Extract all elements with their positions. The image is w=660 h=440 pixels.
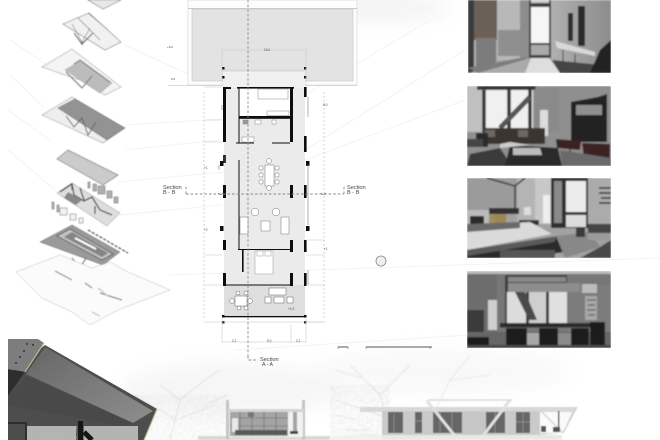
close-up: steel bracket (8, 339, 44, 372)
bottom rendering: long elevation (330, 400, 577, 440)
layer: top roof fragment (88, 0, 121, 9)
plan: bedroom and terrace (224, 285, 305, 318)
section label: right: Section (347, 185, 366, 191)
plan annotations: +1 (324, 247, 328, 251)
layer: interior walls and windows (52, 182, 120, 226)
bottom rendering: section elevation (198, 400, 330, 440)
section label: right (347, 185, 366, 196)
plan: side glazing (219, 97, 308, 285)
plan annotations: 5.0 (267, 339, 272, 343)
plan annotations: 2.1 (232, 339, 237, 343)
faint leader lines (8, 20, 660, 350)
plan: kitchen and bath fixtures (242, 89, 289, 142)
layer: roof frame (63, 13, 121, 50)
photo: bathroom and corridor (468, 0, 611, 73)
scale bar (338, 346, 432, 349)
plan: walls (220, 67, 310, 324)
faint landscape wash (120, 0, 570, 418)
elevation: ground (330, 433, 400, 440)
plan: living room furniture (240, 208, 289, 234)
elevation: V struts (427, 400, 510, 436)
plan: dining table (259, 159, 279, 190)
marker circle (376, 256, 386, 266)
plan annotations: +1 (204, 166, 208, 170)
plan: dimension lines (204, 48, 325, 343)
level tags: +0.0 (167, 45, 173, 49)
exploded axonometric diagram (16, 0, 170, 325)
floor plan (186, 0, 344, 360)
level tags: 0.0 (171, 77, 176, 81)
level tags (167, 45, 176, 81)
photo: dining room (467, 271, 611, 348)
plan annotations: +1.0 (288, 307, 295, 311)
layer: ceiling panel (57, 150, 118, 185)
plan: interior floor (224, 88, 305, 285)
plan: bed (255, 251, 273, 274)
photo: bedroom (467, 178, 611, 258)
section label: left (163, 185, 182, 196)
plan: terrace furniture (230, 288, 293, 310)
layer: roof structure (42, 49, 121, 95)
plan: section cut lines (186, 0, 344, 360)
photo: living room (467, 86, 611, 166)
section label: bottom (260, 357, 279, 368)
section label: right: B - B (347, 190, 360, 196)
layer: foundation and floor (40, 225, 128, 268)
bottom rendering: site fog and trees (120, 355, 490, 440)
plan annotations (204, 48, 328, 343)
bottom rendering: roof close-up (8, 339, 157, 440)
plan annotations: 0.0 (323, 103, 328, 107)
section label: left: Section (163, 185, 182, 191)
elevation: windows (388, 412, 530, 433)
close-up: window openings (26, 426, 138, 440)
layer: roof deck (42, 97, 125, 143)
section label: left: B - B (163, 190, 176, 196)
layer: terrain (16, 255, 170, 325)
site strip above plan (168, 0, 357, 86)
plan: terrace top (223, 72, 305, 88)
plan: service room (239, 88, 291, 117)
plan annotations: +2 (204, 228, 208, 232)
section label: bottom: A - A (262, 362, 273, 368)
elevation: terrace furniture (541, 411, 560, 432)
plan annotations: 10.0 (264, 48, 270, 52)
close-up: roof soffit (8, 345, 157, 440)
plan annotations: 2.1 (296, 339, 301, 343)
close-up: roof top plane (26, 347, 153, 423)
close-up: column (80, 421, 92, 440)
section label: bottom: Section (260, 357, 279, 363)
